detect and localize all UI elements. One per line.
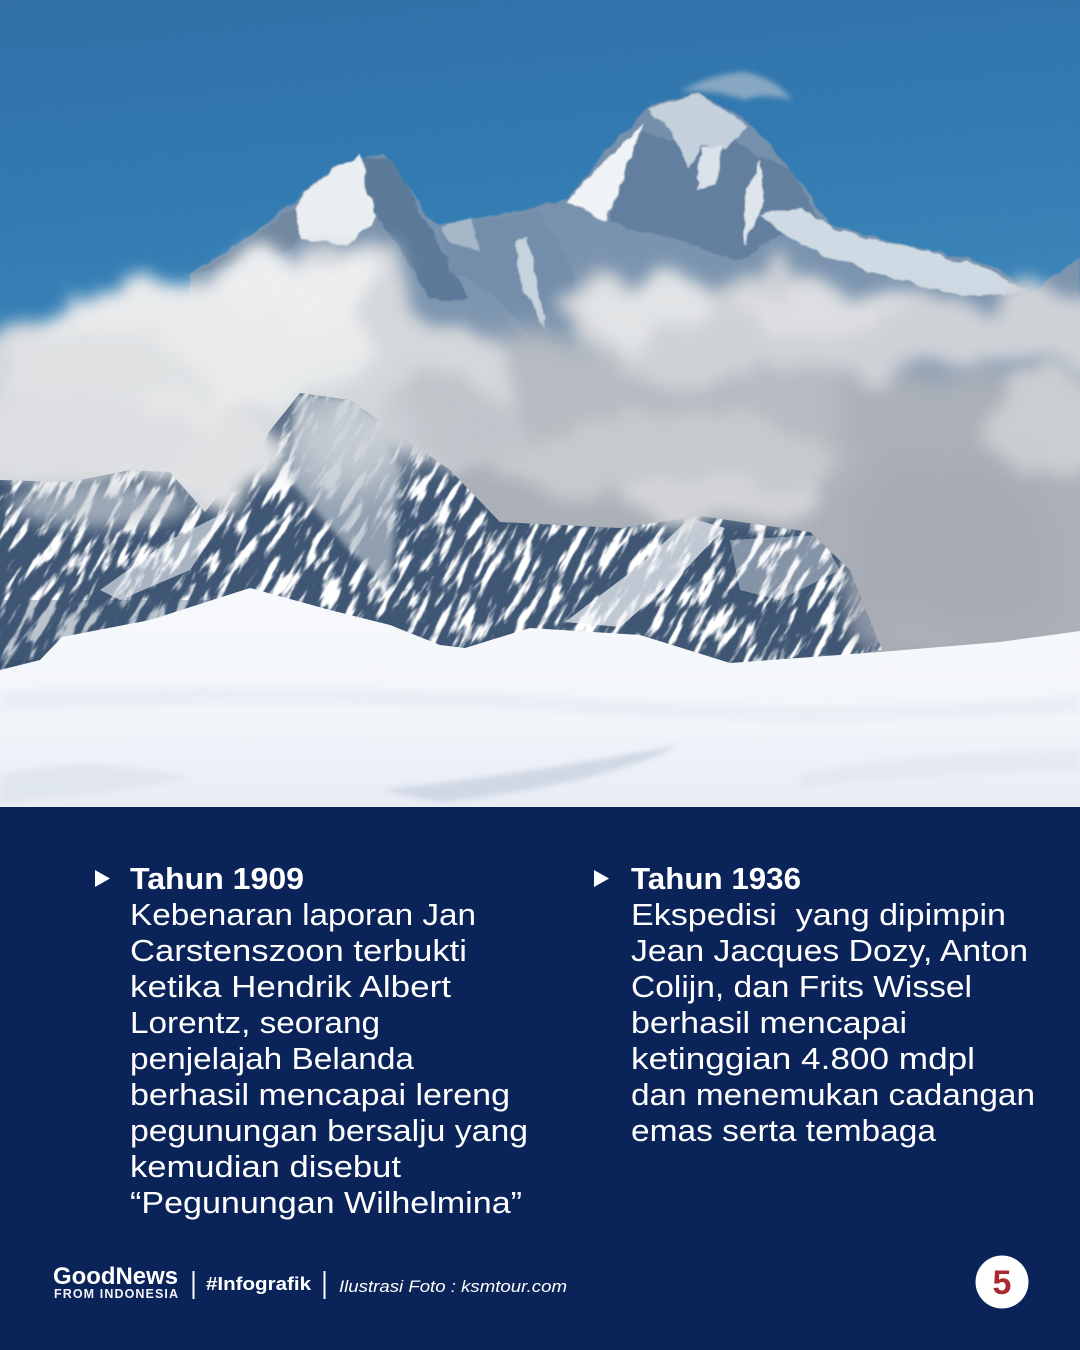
text block: Tahun 1909 — [95, 861, 528, 1220]
body: 1936 paragraph: ketinggian 4.800 mdpl — [631, 1041, 975, 1076]
body: 1936 paragraph: berhasil mencapai — [631, 1005, 907, 1040]
text block: Tahun 1936 — [594, 861, 1035, 1148]
body: 1909 paragraph: berhasil mencapai lereng — [130, 1077, 510, 1112]
page number badge: 5 — [993, 1264, 1011, 1302]
hashtag: Infografik: #Infografik — [206, 1273, 312, 1294]
body: 1909 paragraph: Lorentz, seorang — [130, 1005, 380, 1040]
wisp cloud above summit — [680, 72, 792, 100]
body: 1909 paragraph: pegunungan bersalju yang — [130, 1113, 528, 1148]
panel: navy text background — [0, 807, 1080, 1350]
upper cloud bank — [0, 245, 1080, 530]
upper ridge with twin peaks — [190, 94, 1080, 420]
page number badge — [976, 1256, 1028, 1308]
lower snow-streaked mountains — [0, 393, 882, 670]
body: 1936 paragraph: Jean Jacques Dozy, Anton — [631, 933, 1028, 968]
sky — [0, 0, 1080, 374]
body: 1936 paragraph: Ekspedisi yang dipimpin — [631, 897, 1006, 932]
icon: bullet triangle 1909 — [95, 870, 110, 887]
body: 1936 paragraph: emas serta tembaga — [631, 1113, 937, 1148]
logo: GoodNews from Indonesia: FROM INDONESIA — [54, 1287, 178, 1301]
body: 1936 paragraph: Colijn, dan Frits Wissel — [631, 969, 972, 1004]
body: 1936 paragraph — [631, 897, 1035, 1148]
body: 1909 paragraph: “Pegunungan Wilhelmina” — [130, 1185, 522, 1220]
snow foreground — [0, 588, 1080, 807]
heading: Tahun 1909: Tahun 1909 — [130, 861, 304, 896]
icon: bullet triangle 1936 — [594, 870, 609, 887]
film grain — [0, 0, 1080, 660]
body: 1909 paragraph: kemudian disebut — [130, 1149, 401, 1184]
body: 1909 paragraph: penjelajah Belanda — [130, 1041, 415, 1076]
footer — [53, 1256, 1028, 1308]
photo credit: Ilustrasi Foto : ksmtour.com — [339, 1277, 567, 1296]
photo: snowy mountain peaks above clouds — [0, 0, 1080, 807]
body: 1936 paragraph: dan menemukan cadangan — [631, 1077, 1035, 1112]
body: 1909 paragraph: ketika Hendrik Albert — [130, 969, 451, 1004]
heading: Tahun 1936: Tahun 1936 — [631, 861, 801, 896]
logo: GoodNews from Indonesia: GoodNews — [53, 1263, 178, 1290]
back cloud layer — [196, 314, 1080, 654]
lower cloud veil — [0, 360, 1080, 650]
body: 1909 paragraph — [130, 897, 528, 1220]
body: 1909 paragraph: Carstenszoon terbukti — [130, 933, 467, 968]
body: 1909 paragraph: Kebenaran laporan Jan — [130, 897, 476, 932]
